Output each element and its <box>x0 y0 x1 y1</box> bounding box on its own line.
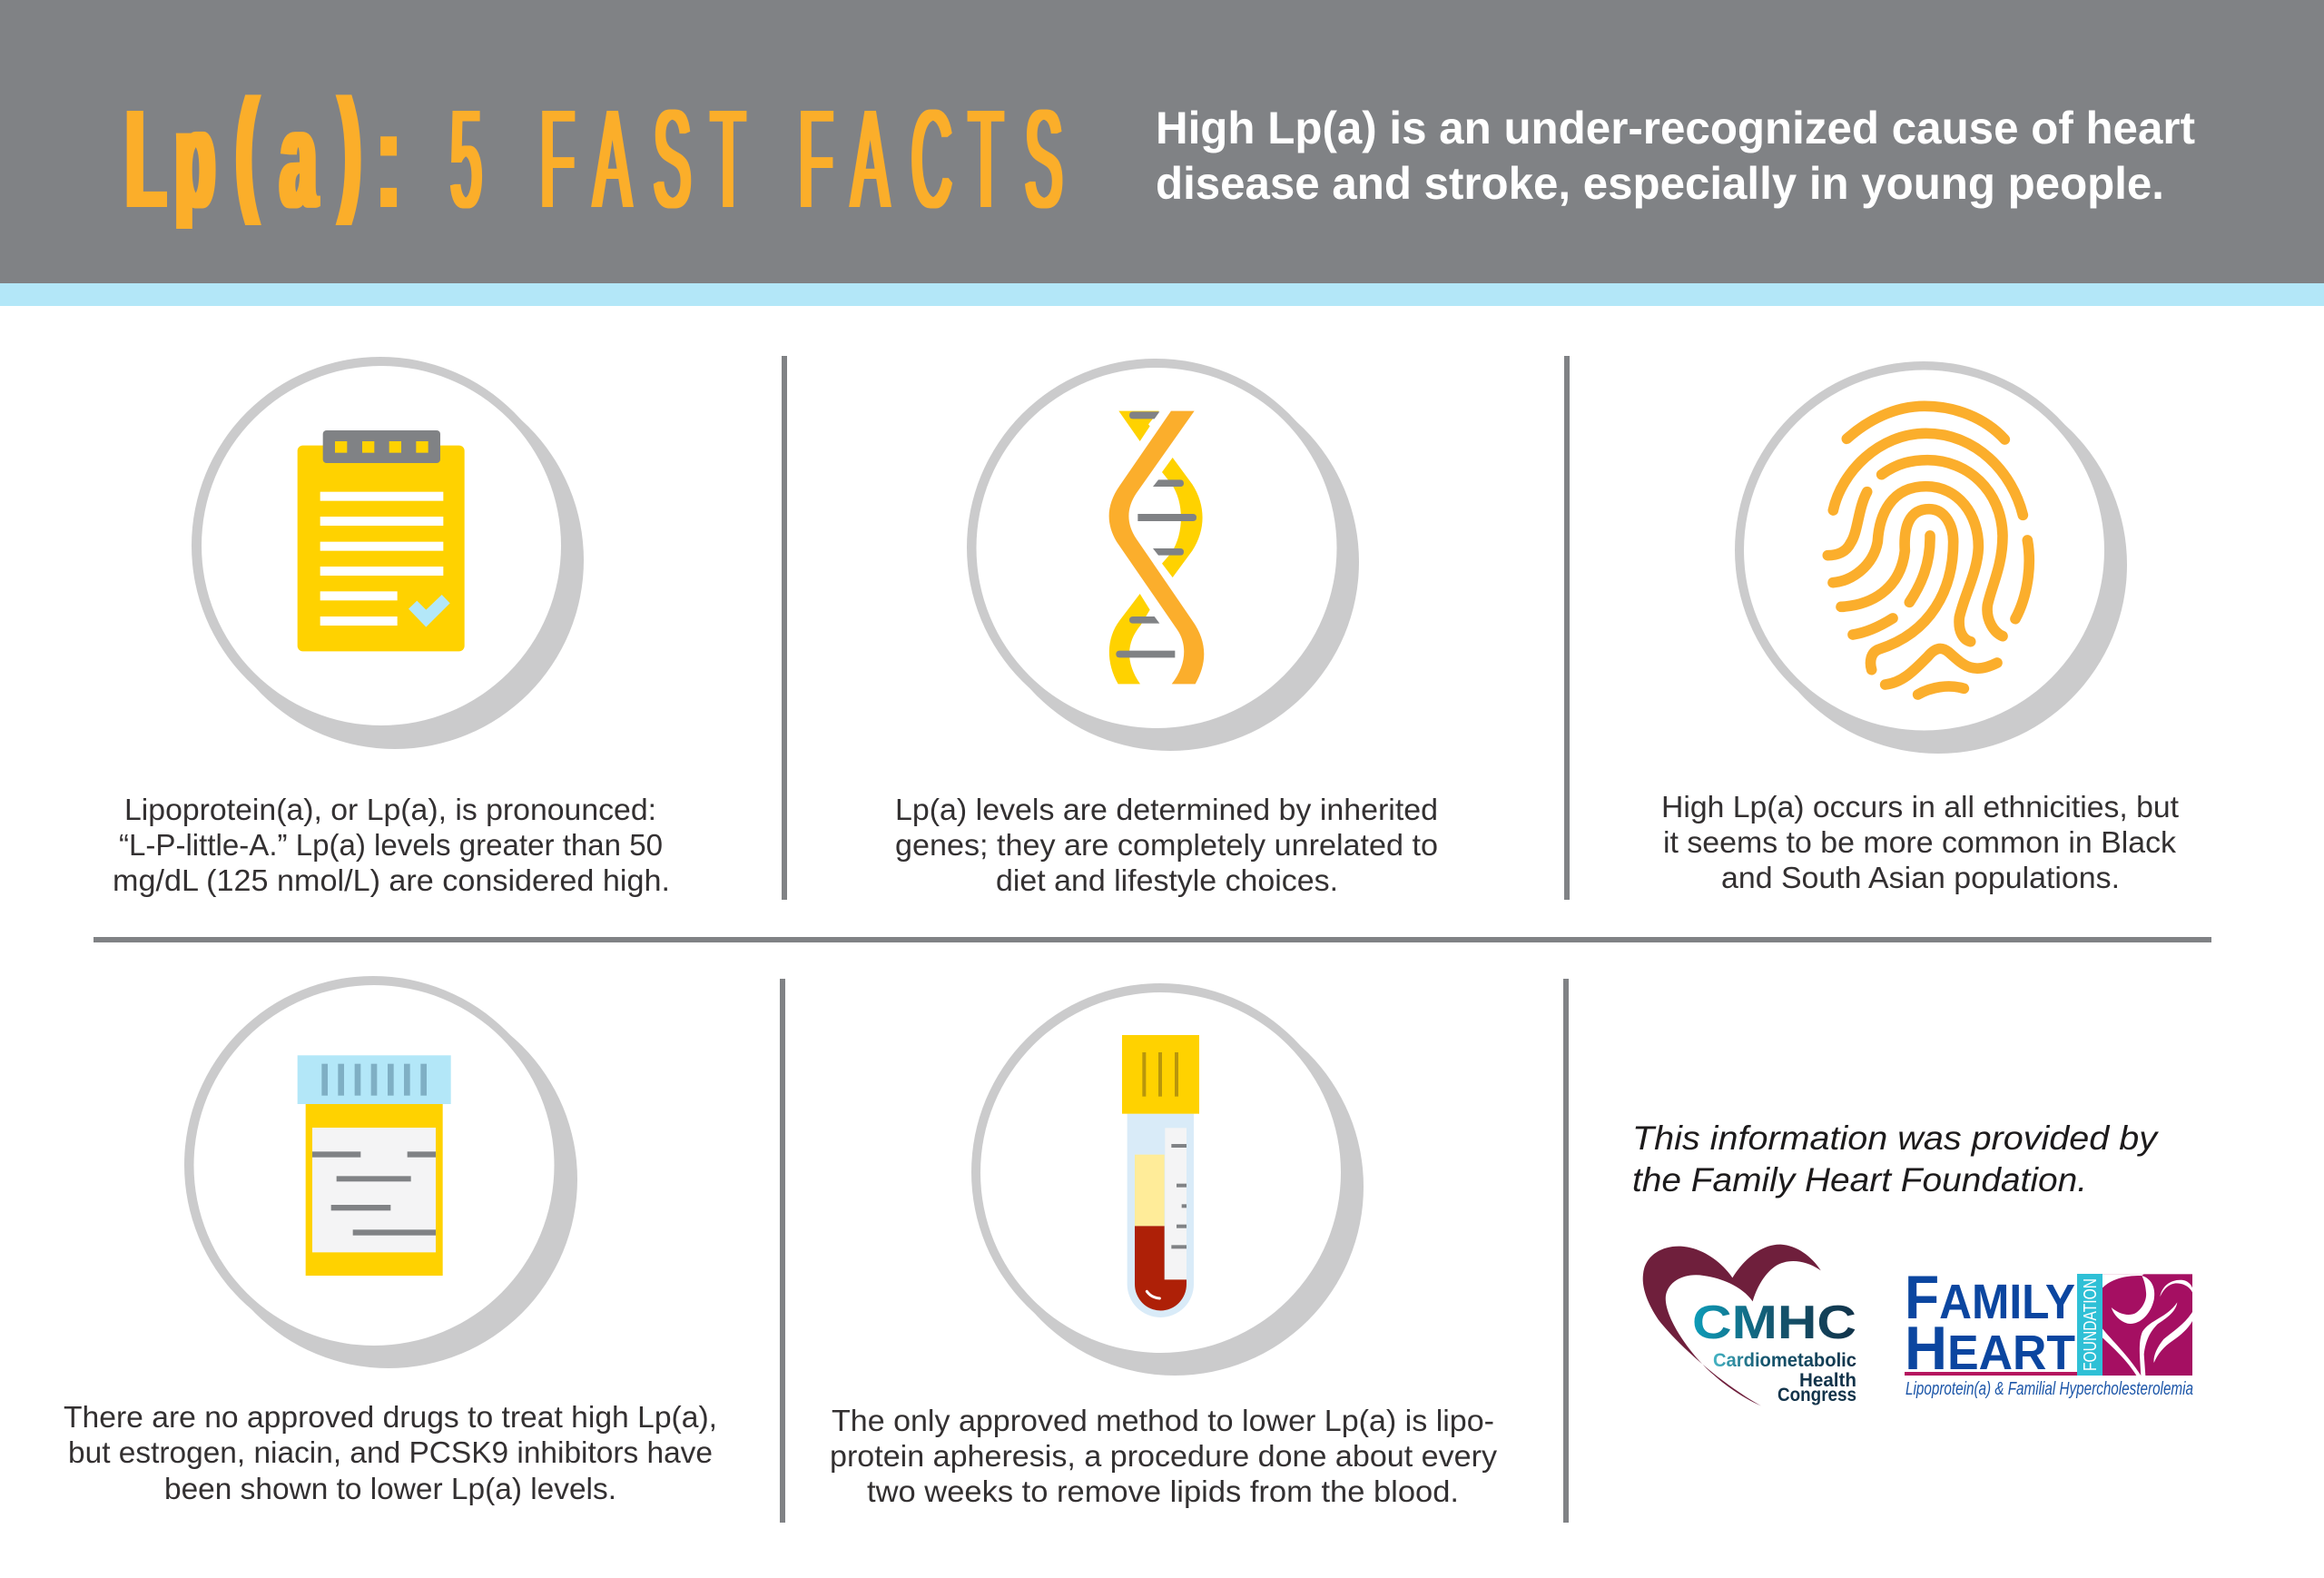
CMHC wordmark: CMHC <box>1692 1297 1856 1349</box>
text: genetics <box>895 793 1438 897</box>
credit text: This information was provided by <box>1632 1119 2160 1157</box>
header subtitle <box>1156 103 2195 209</box>
magenta heart emblem <box>2102 1274 2192 1376</box>
text: drugs: been shown to lower Lp(a) levels. <box>164 1472 616 1505</box>
icon ring 2 <box>967 359 1359 751</box>
title <box>127 94 1062 229</box>
credit text: the Family Heart Foundation. <box>1632 1161 2087 1198</box>
text: pronunciation: mg/dL (125 nmol/L) are considered high. <box>113 863 670 897</box>
text: apheresis: The only approved method to lower Lp(a) is lipo- <box>832 1404 1494 1437</box>
title part: 5 FAST FACTS: 5 FAST FACTS <box>450 81 1062 237</box>
header subtitle: disease and stroke, especially in young people. <box>1156 158 2164 209</box>
panel: ethnicity <box>1661 361 2179 894</box>
icon: clipboard <box>298 430 465 651</box>
text: genetics: Lp(a) levels are determined by inherited <box>895 793 1438 826</box>
text: apheresis: protein apheresis, a procedure done about every <box>830 1439 1498 1473</box>
CMHC full name: Congress <box>1777 1385 1856 1405</box>
text: ethnicity: High Lp(a) occurs in all ethnicities, but <box>1661 790 2179 824</box>
icon: DNA helix <box>1109 411 1204 684</box>
text: pronunciation: “L-P-little-A.” Lp(a) levels greater than 50 <box>119 828 663 862</box>
logo: CMHC <box>1643 1245 1856 1405</box>
logo tagline: Lipoprotein(a) & Familial Hypercholesterolemia <box>1905 1379 2193 1399</box>
panel: credits <box>1632 1119 2193 1405</box>
logo wordmark: HEART <box>1905 1314 2075 1383</box>
text: pronunciation: Lipoprotein(a), or Lp(a), is pronounced: <box>124 793 656 826</box>
text: drugs: There are no approved drugs to treat high Lp(a), <box>64 1400 717 1434</box>
heart mark <box>1643 1245 1821 1405</box>
icon ring 1 <box>192 357 584 749</box>
foundation tab: FOUNDATION <box>2081 1278 2101 1371</box>
logo wordmark: FAMILY <box>1905 1263 2075 1332</box>
text: genetics: genes; they are completely unrelated to <box>895 828 1438 862</box>
foundation tab <box>2077 1274 2102 1376</box>
icon: pill bottle <box>298 1055 451 1276</box>
icon ring 5 <box>971 983 1364 1376</box>
text: ethnicity: it seems to be more common in Black <box>1663 825 2176 859</box>
logo: Family Heart Foundation <box>1905 1263 2193 1399</box>
text: drugs: but estrogen, niacin, and PCSK9 inhibitors have <box>68 1435 713 1469</box>
title part: Lp(a):: Lp(a): <box>126 70 399 237</box>
icon ring 4 <box>184 976 577 1368</box>
icon ring 3 <box>1735 361 2127 754</box>
panel: apheresis <box>830 983 1498 1508</box>
header band <box>0 0 2324 306</box>
CMHC full name: Health <box>1799 1370 1856 1391</box>
text: ethnicity <box>1661 790 2179 894</box>
text: pronunciation <box>113 793 670 897</box>
panel: pronunciation <box>113 357 670 897</box>
text: apheresis <box>830 1404 1498 1508</box>
dividers <box>94 356 2211 1523</box>
credit text <box>1632 1119 2160 1198</box>
CMHC full name <box>1713 1350 1856 1405</box>
panel: genetics <box>895 359 1438 897</box>
logo wordmark <box>1905 1263 2075 1383</box>
panel: drugs <box>64 976 717 1505</box>
text: drugs <box>64 1400 717 1505</box>
text: genetics: diet and lifestyle choices. <box>996 863 1338 897</box>
icon: blood test tube <box>1122 1035 1199 1317</box>
text: ethnicity: and South Asian populations. <box>1721 861 2120 894</box>
header subtitle: High Lp(a) is an under-recognized cause of heart <box>1156 103 2195 153</box>
icon: fingerprint <box>1827 406 2029 695</box>
text: apheresis: two weeks to remove lipids from the blood. <box>867 1474 1459 1508</box>
logo underline <box>1905 1372 2077 1376</box>
CMHC full name: Cardiometabolic <box>1713 1350 1856 1371</box>
